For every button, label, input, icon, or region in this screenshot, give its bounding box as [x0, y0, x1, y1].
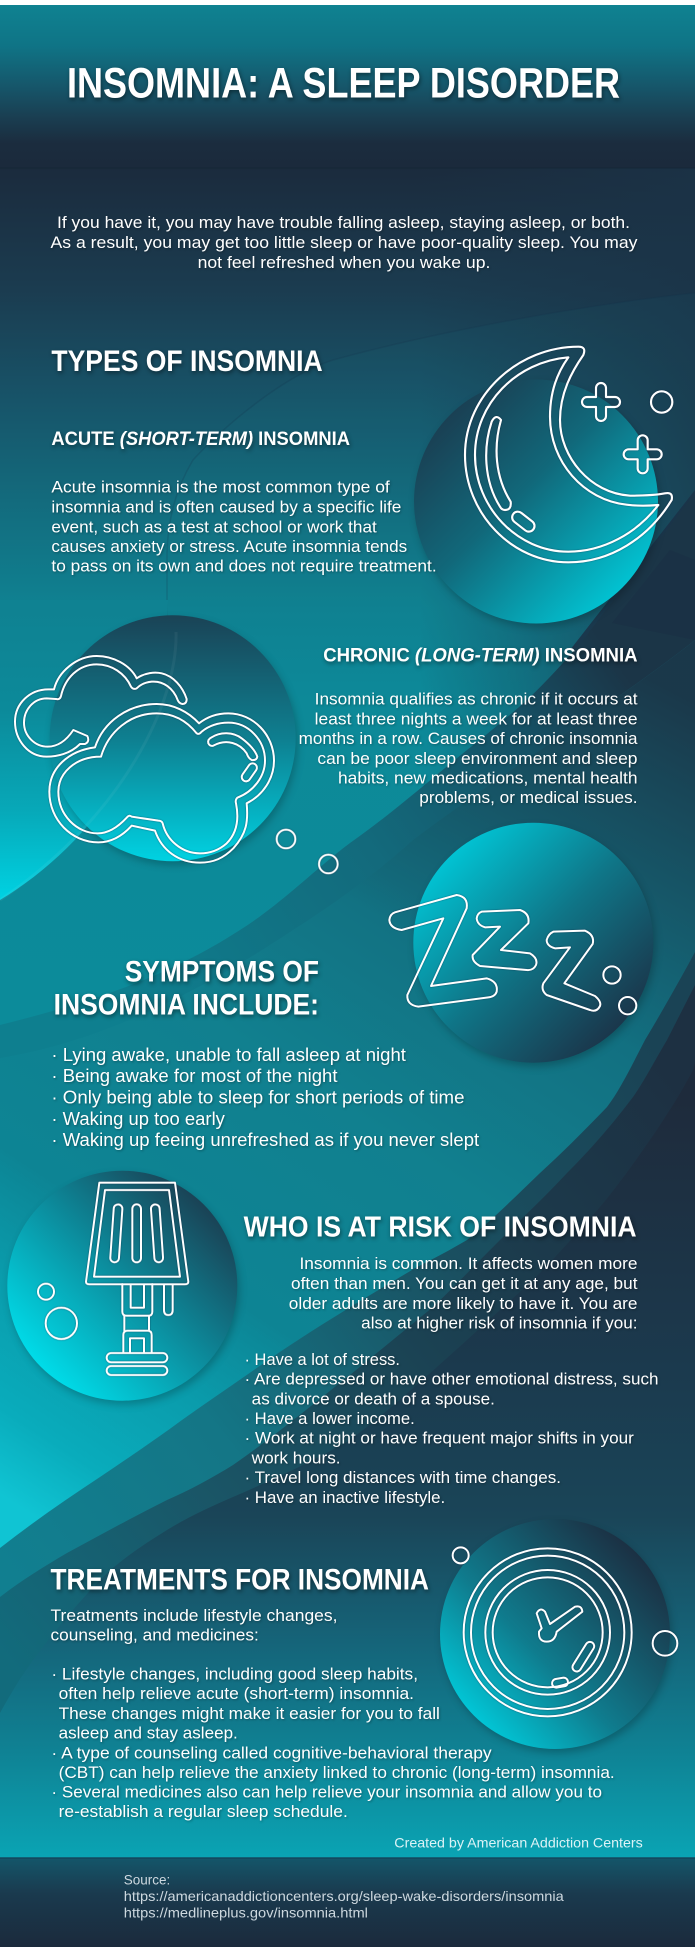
text: treatments: asleep and stay asleep.	[59, 1723, 238, 1742]
text: acute insomnia: Acute insomnia is the most common type of	[51, 478, 390, 496]
list: symptoms: · Only being able to sleep for short periods of time	[51, 1087, 465, 1107]
source text: https://medlineplus.gov/insomnia.html	[124, 1904, 368, 1920]
footer band	[0, 1857, 695, 1947]
text: treatments: · Lifestyle changes, including good sleep habits,	[51, 1665, 418, 1684]
text: chronic insomnia: least three nights a week for at least three	[315, 709, 638, 728]
subheading: chronic insomnia: CHRONIC (LONG-TERM) INSOMNIA	[323, 644, 638, 666]
text: treatments: These changes might make it easier for you to fall	[59, 1704, 440, 1723]
text: acute insomnia	[51, 478, 437, 576]
list: risk factors: as divorce or death of a spouse.	[252, 1390, 495, 1408]
text: risk intro: also at higher risk of insomnia if you:	[361, 1313, 638, 1332]
intro text	[50, 213, 638, 272]
list: risk factors: work hours.	[251, 1448, 341, 1467]
icon: lamp	[38, 1183, 188, 1375]
text: chronic insomnia: Insomnia qualifies as chronic if it occurs at	[315, 690, 638, 708]
intro text: not feel refreshed when you wake up.	[198, 253, 490, 272]
text: chronic insomnia: habits, new medications, mental health	[338, 768, 638, 787]
heading: symptoms: INSOMNIA INCLUDE:	[54, 989, 319, 1022]
cloud disc	[50, 615, 296, 861]
list: symptoms	[51, 1045, 479, 1150]
icon: clouds	[15, 656, 338, 873]
heading: symptoms	[54, 955, 319, 1022]
source text: https://americanaddictioncenters.org/sleep-wake-disorders/insomnia	[124, 1888, 564, 1904]
list: risk factors: · Are depressed or have other emotional distress, such	[244, 1370, 658, 1388]
text: chronic insomnia: months in a row. Causes of chronic insomnia	[299, 729, 638, 748]
list: risk factors: · Have a lower income.	[244, 1409, 415, 1428]
list: risk factors: · Work at night or have frequent major shifts in your	[244, 1429, 634, 1448]
text: acute insomnia: event, such as a test at school or work that	[51, 517, 377, 536]
text: treatments: re-establish a regular sleep schedule.	[59, 1802, 348, 1821]
text: treatments: counseling, and medicines:	[50, 1626, 259, 1644]
lamp disc	[7, 1171, 237, 1401]
text: treatments	[50, 1606, 615, 1821]
text: chronic insomnia: problems, or medical issues.	[419, 788, 638, 807]
text: chronic insomnia: can be poor sleep environment and sleep	[317, 749, 638, 768]
text: risk intro	[289, 1254, 638, 1332]
text: acute insomnia: insomnia and is often caused by a specific life	[51, 497, 401, 516]
list: risk factors: · Have an inactive lifestyle.	[244, 1488, 445, 1507]
intro text: If you have it, you may have trouble falling asleep, staying asleep, or both.	[57, 213, 630, 232]
zzz disc	[413, 823, 653, 1063]
icon: moon and stars	[465, 347, 672, 562]
heading: symptoms: SYMPTOMS OF	[125, 955, 319, 988]
text: chronic insomnia	[299, 690, 638, 807]
list: risk factors	[244, 1350, 658, 1507]
text: risk intro: often than men. You can get it at any age, but	[291, 1274, 638, 1293]
list: symptoms: · Waking up too early	[51, 1109, 225, 1129]
icon: clock	[453, 1547, 677, 1716]
faint curve across cloud disc	[0, 632, 176, 900]
text: treatments: often help relieve acute (short-term) insomnia.	[59, 1684, 414, 1703]
text: acute insomnia: causes anxiety or stress. Acute insomnia tends	[51, 537, 407, 556]
list: risk factors: · Travel long distances with time changes.	[244, 1468, 561, 1487]
intro text: As a result, you may get too little sleep or have poor-quality sleep. You may	[50, 233, 638, 252]
moon disc	[414, 380, 658, 624]
heading: who is at risk: WHO IS AT RISK OF INSOMNIA	[244, 1211, 637, 1243]
subheading: acute insomnia: ACUTE (SHORT-TERM) INSOMNIA	[51, 428, 350, 450]
text: risk intro: older adults are more likely to have it. You are	[289, 1294, 638, 1313]
text: treatments: (CBT) can help relieve the anxiety linked to chronic (long-term) insomnia.	[59, 1763, 615, 1782]
text: risk intro: Insomnia is common. It affects women more	[300, 1254, 638, 1273]
credit: Created by American Addiction Centers	[394, 1834, 643, 1850]
heading: treatments: TREATMENTS FOR INSOMNIA	[50, 1563, 429, 1596]
list: symptoms: · Lying awake, unable to fall asleep at night	[51, 1045, 406, 1065]
header band	[0, 5, 695, 169]
list: risk factors: · Have a lot of stress.	[244, 1350, 400, 1369]
source text: Source:	[124, 1872, 170, 1888]
text: treatments: Treatments include lifestyle changes,	[50, 1606, 338, 1625]
icon: zzz	[389, 895, 636, 1014]
source text	[124, 1872, 564, 1920]
clock disc	[440, 1519, 670, 1749]
text: treatments: · A type of counseling called cognitive-behavioral therapy	[51, 1743, 492, 1762]
list: symptoms: · Being awake for most of the night	[51, 1066, 338, 1086]
list: symptoms: · Waking up feeing unrefreshed as if you never slept	[51, 1130, 479, 1150]
text: treatments: · Several medicines also can help relieve your insomnia and allow you to	[51, 1783, 602, 1802]
text: acute insomnia: to pass on its own and does not require treatment.	[51, 557, 437, 576]
heading: types of insomnia: TYPES OF INSOMNIA	[51, 345, 323, 378]
